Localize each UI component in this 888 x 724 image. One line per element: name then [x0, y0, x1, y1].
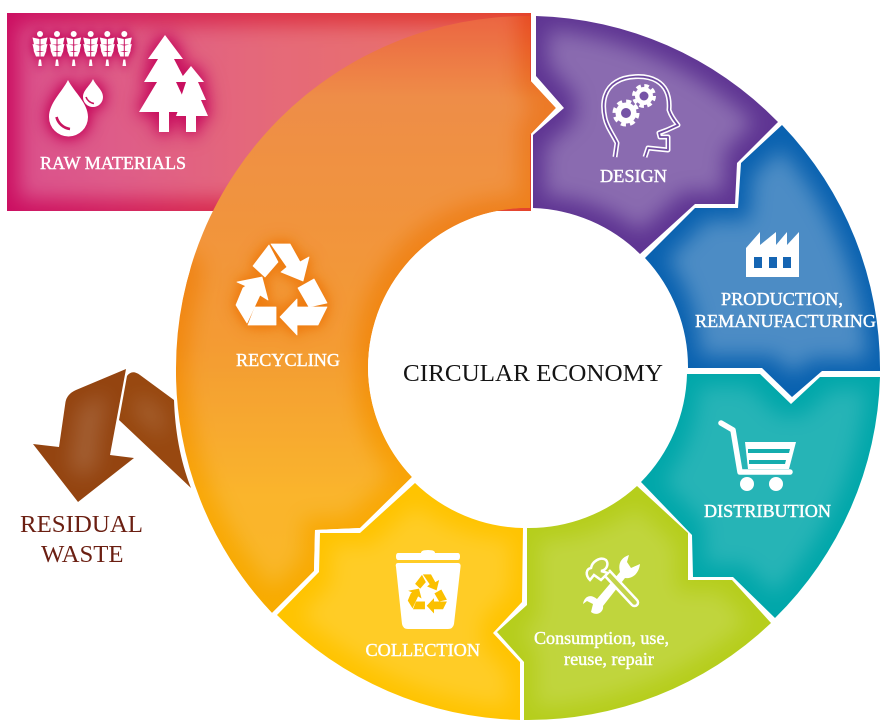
icon: hammer and wrench: [583, 555, 640, 614]
icon: trees: [139, 35, 208, 132]
label: residual waste: [20, 512, 143, 568]
panel: design: [533, 16, 778, 254]
icon: recycling arrows: [236, 244, 327, 335]
panel: raw materials: [7, 13, 531, 211]
label: production, remanufacturing: [695, 289, 876, 331]
label: consumption, use, reuse, repair: Consumption, use,: [534, 628, 669, 648]
label: recycling: RECYCLING: [236, 350, 340, 370]
arrow: residual waste: [33, 369, 191, 502]
title: circular economy: CIRCULAR ECONOMY: [403, 361, 663, 387]
icon: factory: [746, 232, 799, 277]
icon: water drops: [49, 79, 103, 136]
panel: recycling: [176, 16, 556, 613]
panel: consumption, use, reuse, repair: [497, 486, 771, 720]
panel: production, remanufacturing: [645, 125, 880, 397]
icon: head with gears: [604, 77, 678, 157]
label: design: DESIGN: [600, 166, 667, 186]
label: collection: COLLECTION: [366, 640, 480, 660]
label: residual waste: WASTE: [41, 542, 124, 568]
label: production, remanufacturing: REMANUFACTURING: [695, 311, 876, 331]
label: consumption, use, reuse, repair: [534, 628, 669, 669]
label: raw materials: RAW MATERIALS: [40, 153, 186, 173]
label: distribution: DISTRIBUTION: [704, 501, 831, 521]
icon: wheat row: [32, 31, 132, 66]
icon: recycling bin: [396, 550, 461, 629]
panel: distribution: [641, 374, 880, 618]
label: production, remanufacturing: PRODUCTION,: [721, 289, 843, 309]
panel: collection: [277, 483, 523, 720]
label: residual waste: RESIDUAL: [20, 512, 143, 538]
icon: shopping cart: [721, 423, 796, 491]
label: consumption, use, reuse, repair: reuse, repair: [564, 649, 654, 669]
